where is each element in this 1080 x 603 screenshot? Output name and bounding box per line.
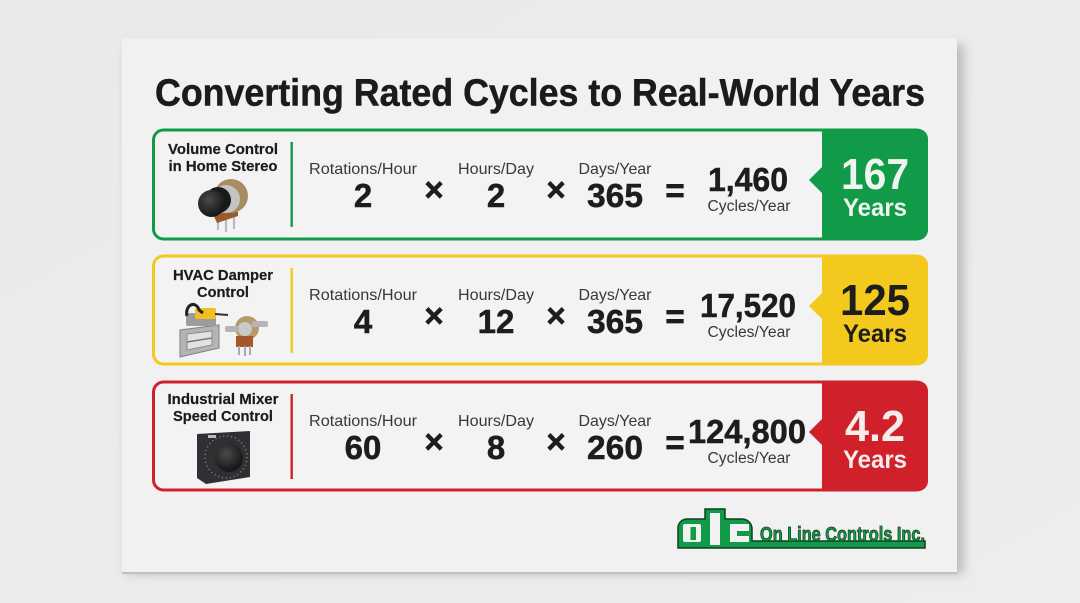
badge: 4.2 years	[809, 381, 928, 491]
formula: days per year	[578, 161, 652, 214]
row heading: hvac damper	[173, 267, 273, 301]
result: cycles per year: 17,520	[700, 287, 796, 324]
badge: 125 years: 125	[840, 276, 910, 325]
badge: 167 years: Years	[843, 194, 907, 222]
formula: days per year: 365	[587, 177, 643, 214]
formula: rotations per hour	[309, 161, 418, 214]
row heading: volume control: Volume Control	[168, 141, 278, 158]
icon: panel speed controller	[197, 431, 250, 484]
row heading: hvac damper: Control	[197, 284, 249, 301]
formula: hours per day: 12	[478, 303, 514, 340]
formula: days per year	[578, 413, 652, 466]
result: cycles per year	[688, 413, 806, 467]
multiply: ×	[424, 297, 444, 334]
formula: days per year: Days/Year	[578, 413, 652, 430]
multiply: ×	[546, 423, 566, 460]
multiply: ×	[424, 423, 444, 460]
multiply: ×	[424, 171, 444, 208]
icon: damper actuator and potentiometer	[180, 304, 268, 357]
formula: hours per day	[458, 413, 534, 466]
row heading: industrial mixer: Industrial Mixer	[168, 391, 279, 408]
formula: rotations per hour: Rotations/Hour	[309, 161, 418, 178]
formula: rotations per hour: 2	[354, 177, 372, 214]
formula: hours per day: Hours/Day	[458, 287, 534, 304]
row heading: industrial mixer: Speed Control	[173, 408, 273, 425]
formula: rotations per hour: Rotations/Hour	[309, 413, 418, 430]
result: cycles per year: 124,800	[688, 413, 806, 450]
badge: 125 years: Years	[843, 320, 907, 348]
row heading: volume control	[168, 141, 278, 175]
formula: days per year: Days/Year	[578, 287, 652, 304]
panel: industrial mixer row	[154, 381, 928, 491]
panel: hvac damper row	[154, 255, 928, 365]
result: cycles per year: 1,460	[708, 161, 788, 198]
badge: 125 years	[809, 255, 928, 365]
badge: 167 years: 167	[841, 150, 909, 199]
logo: On Line Controls Inc.	[678, 509, 925, 548]
formula: hours per day: Hours/Day	[458, 161, 534, 178]
formula: rotations per hour	[309, 287, 418, 340]
badge: 4.2 years: 4.2	[845, 402, 905, 451]
formula: rotations per hour: 60	[345, 429, 381, 466]
badge: 167 years	[809, 129, 928, 240]
formula: days per year: 260	[587, 429, 643, 466]
formula: rotations per hour: Rotations/Hour	[309, 287, 418, 304]
formula: hours per day: 2	[487, 177, 505, 214]
formula: days per year: Days/Year	[578, 161, 652, 178]
logo: On Line Controls Inc.: On Line Controls Inc.	[760, 524, 925, 546]
formula: hours per day	[458, 161, 534, 214]
result: cycles per year: Cycles/Year	[708, 198, 790, 215]
multiply: ×	[546, 297, 566, 334]
formula: hours per day: Hours/Day	[458, 413, 534, 430]
formula: rotations per hour: 4	[354, 303, 373, 340]
formula: days per year: 365	[587, 303, 643, 340]
panel: volume control row	[154, 129, 928, 240]
result: cycles per year: Cycles/Year	[708, 450, 790, 467]
row heading: volume control: in Home Stereo	[168, 158, 278, 175]
result: cycles per year	[700, 287, 796, 341]
multiply: ×	[546, 171, 566, 208]
equals: =	[665, 298, 685, 335]
icon: potentiometer with knob	[198, 179, 248, 232]
formula: hours per day: 8	[487, 429, 505, 466]
title: Converting Rated Cycles to Real-World Years	[155, 72, 925, 114]
formula: rotations per hour	[309, 413, 418, 466]
row heading: industrial mixer	[168, 391, 279, 425]
formula: days per year	[578, 287, 652, 340]
equals: =	[665, 424, 685, 461]
panel: card	[122, 38, 957, 572]
formula: hours per day	[458, 287, 534, 340]
result: cycles per year	[708, 161, 790, 215]
badge: 4.2 years: Years	[843, 446, 907, 474]
result: cycles per year: Cycles/Year	[708, 324, 790, 341]
equals: =	[665, 172, 685, 209]
row heading: hvac damper: HVAC Damper	[173, 267, 273, 284]
